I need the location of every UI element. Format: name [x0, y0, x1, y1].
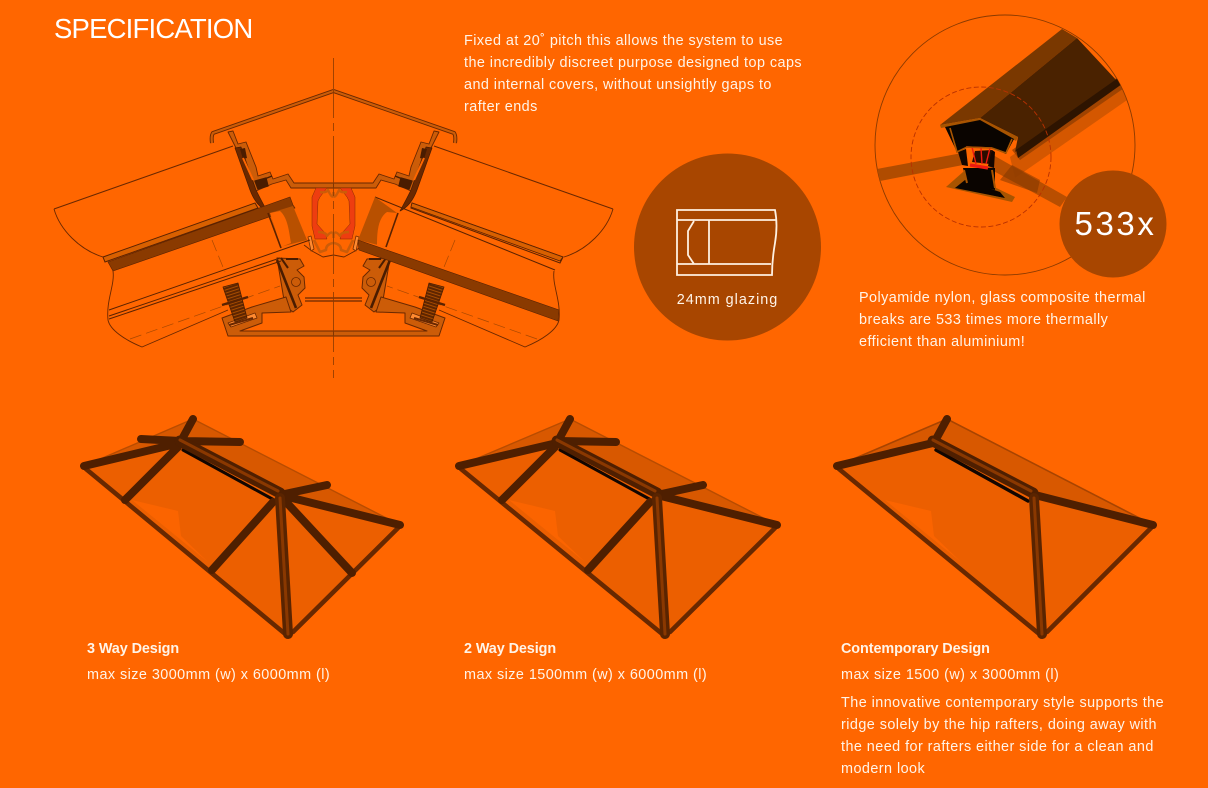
caption: 3 way design	[87, 641, 330, 683]
title: SPECIFICATION	[54, 13, 252, 44]
roof: contemporary design	[837, 419, 1153, 634]
caption: contemporary design: The innovative contemporary style supports the	[841, 695, 1164, 711]
caption: 2 way design	[464, 641, 707, 683]
icon: glazing unit	[677, 210, 776, 275]
caption: 2 way design: max size 1500mm (w) x 6000mm (l)	[464, 667, 707, 683]
text block: thermal breaks	[859, 290, 1146, 350]
left half	[54, 91, 334, 347]
text block: 20 degree pitch	[464, 33, 802, 115]
right half	[334, 91, 613, 347]
text block: thermal breaks: breaks are 533 times more thermally	[859, 312, 1108, 328]
caption: 3 way design: 3 Way Design	[87, 641, 179, 657]
roof: 2 way design	[459, 419, 777, 634]
caption: 2 way design: 2 Way Design	[464, 641, 556, 657]
caption: contemporary design: max size 1500 (w) x 3000mm (l)	[841, 667, 1059, 683]
caption: contemporary design: ridge solely by the hip rafters, doing away with	[841, 717, 1157, 733]
caption: contemporary design	[841, 641, 1164, 777]
text block: thermal breaks: efficient than aluminium!	[859, 334, 1025, 350]
text block: thermal breaks: Polyamide nylon, glass composite thermal	[859, 290, 1146, 306]
caption: contemporary design: Contemporary Design	[841, 641, 990, 657]
left glazing unit	[103, 197, 310, 319]
badge	[1060, 170, 1166, 278]
thermal break profile	[877, 29, 1130, 207]
caption: 3 way design: max size 3000mm (w) x 6000mm (l)	[87, 667, 330, 683]
text block: 20 degree pitch: Fixed at 20˚ pitch this allows the system to use	[464, 33, 783, 49]
panel: 533x thermal break circle	[875, 15, 1166, 278]
label: 533x: 533x	[1075, 205, 1156, 242]
right glazing unit	[358, 197, 563, 321]
panel: 24mm glazing badge	[634, 154, 821, 340]
text block: 20 degree pitch: and internal covers, without unsightly gaps to	[464, 77, 772, 93]
caption: contemporary design: the need for rafters either side for a clean and	[841, 739, 1154, 755]
roof: 3 way design	[84, 419, 400, 634]
chart: glazing bar cross-section drawing	[54, 14, 1166, 639]
label: 24mm glazing: 24mm glazing	[677, 292, 778, 308]
caption: contemporary design: modern look	[841, 761, 925, 777]
text block: 20 degree pitch: rafter ends	[464, 99, 538, 115]
centre line	[332, 58, 334, 378]
text block: 20 degree pitch: the incredibly discreet purpose designed top caps	[464, 55, 802, 71]
